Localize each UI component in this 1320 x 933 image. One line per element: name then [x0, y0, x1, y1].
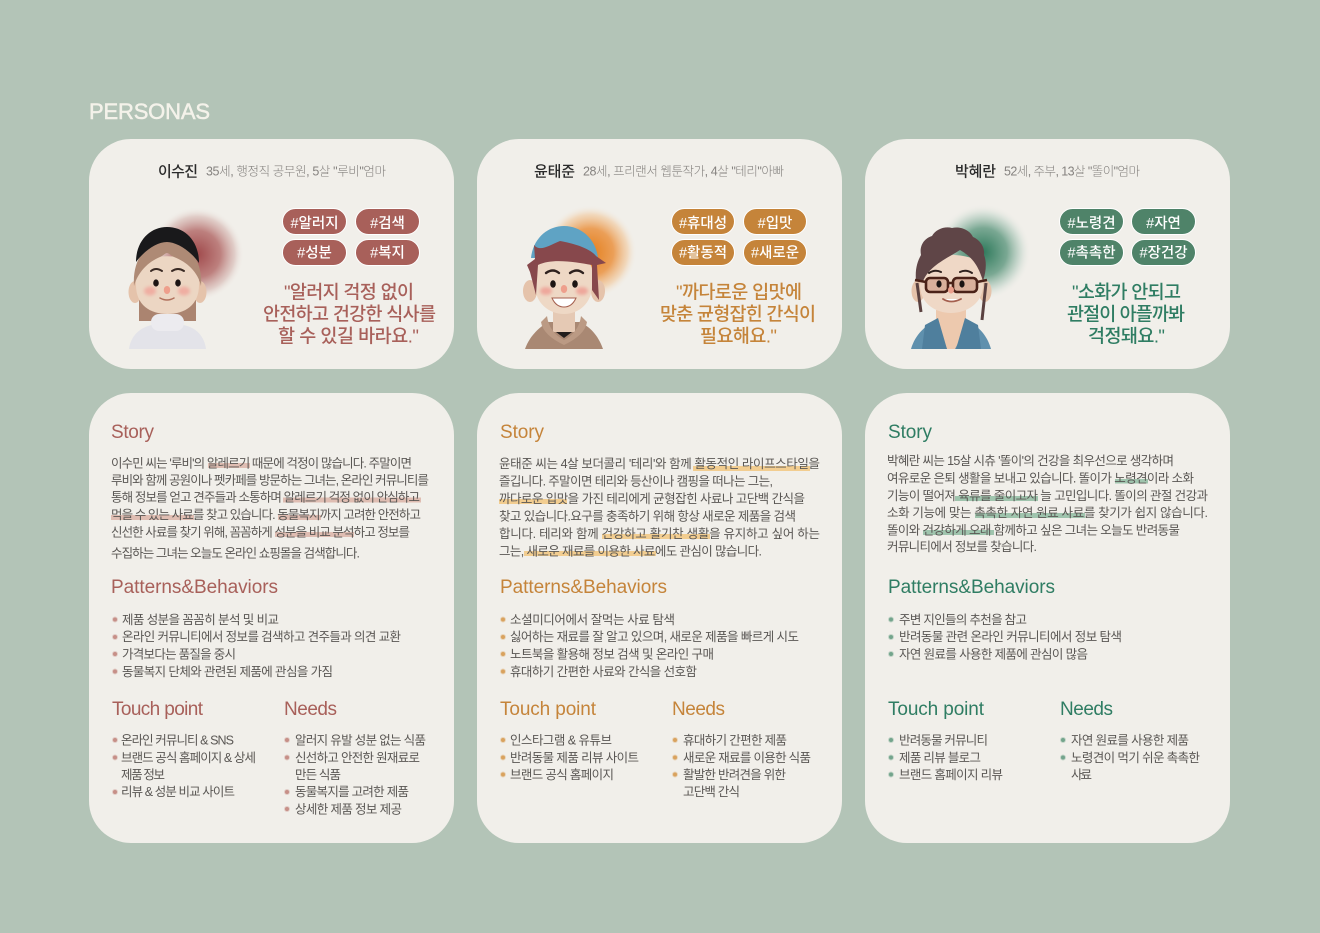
text block: story: 이수민 씨는 '루비'의 알레르기 때문에 걱정이 많습니다. 주말이면 [111, 456, 412, 470]
persona 3 hashtags [1060, 208, 1196, 266]
list: touch points: 반려동물 커뮤니티 [899, 734, 988, 748]
persona 1 hashtags [282, 208, 420, 266]
heading: patterns and behaviors: Patterns&Behaviors [888, 577, 1055, 598]
title: PERSONAS [89, 99, 210, 124]
persona 1 hashtags: #알러지 [290, 215, 339, 232]
icon: persona 1 avatar [128, 207, 244, 349]
text block: story: 그는, 새로운 재료를 이용한 사료에도 관심이 많습니다. [499, 544, 762, 558]
icon: persona 3 avatar [911, 204, 1031, 349]
list: patterns [113, 613, 401, 679]
text block: story: 똘이와 건강하게 오래 함께하고 싶은 그녀는 오늘도 반려동물 [887, 524, 1180, 538]
persona 2 hashtags: #새로운 [751, 244, 799, 262]
text block: story [499, 457, 820, 558]
text block: story: 먹을 수 있는 사료를 찾고 있습니다. 동물복지까지 고려한 안전하고 [111, 508, 421, 522]
text block: story: 신선한 사료를 찾기 위해, 꼼꼼하게 성분을 비교 분석하고 정보를 [111, 526, 410, 540]
persona 1 hashtags: #검색 [370, 215, 405, 232]
panel: persona 1 profile [89, 139, 454, 369]
panel: persona 3 profile [865, 139, 1230, 369]
persona 2 quote [660, 282, 816, 346]
list: needs: 고단백 간식 [683, 785, 740, 799]
list: patterns: 온라인 커뮤니티에서 정보를 검색하고 견주들과 의견 교환 [122, 630, 401, 644]
list: touch points: 리뷰 & 성분 비교 사이트 [121, 785, 235, 799]
persona 2 name and details [534, 164, 784, 180]
list: patterns [501, 613, 799, 679]
text block: story: 통해 정보를 얻고 견주들과 소통하며 알레르기 걱정 없이 안심하고 [111, 490, 420, 504]
heading: story: Story [888, 422, 932, 443]
list: touch points [113, 734, 256, 799]
list: touch points: 브랜드 공식 홈페이지 [510, 768, 614, 782]
heading: story: Story [111, 422, 154, 443]
persona 1 name and details: 35세, 행정직 공무원, 5살 "루비"엄마 [206, 164, 386, 178]
list: needs: 신선하고 안전한 원재료로 [295, 751, 420, 765]
text block: story: 찾고 있습니다.요구를 충족하기 위해 항상 새로운 제품을 검색 [499, 510, 796, 524]
persona 2 name and details: 28세, 프리랜서 웹툰작가, 4살 "테리"아빠 [583, 164, 784, 178]
text block: story: 윤태준 씨는 4살 보더콜리 '테리'와 함께 활동적인 라이프스타일을 [499, 457, 820, 471]
text block: story: 소화 기능에 맞는 촉촉한 자연 원료 사료를 찾기가 쉽지 않습니다. [887, 506, 1208, 520]
persona 2 quote: 필요해요." [700, 326, 777, 346]
persona 2 quote: 맞춘 균형잡힌 간식이 [660, 304, 816, 324]
panel: persona 2 profile [477, 139, 842, 369]
list: needs [285, 734, 426, 816]
text block: story: 루비와 함께 공원이나 펫카페를 방문하는 그녀는, 온라인 커뮤니티를 [111, 474, 429, 488]
icon: persona 2 avatar [523, 205, 637, 349]
list: needs: 노령견이 먹기 쉬운 촉촉한 [1071, 751, 1200, 765]
text block: story: 까다로운 입맛을 가진 테리에게 균형잡힌 사료나 고단백 간식을 [499, 492, 805, 506]
persona 3 name and details [955, 164, 1140, 180]
heading: needs: Needs [1060, 699, 1113, 720]
list: patterns: 싫어하는 재료를 잘 알고 있으며, 새로운 제품을 빠르게 시도 [510, 630, 799, 644]
persona 2 hashtags: #입맛 [758, 215, 792, 232]
list: patterns: 반려동물 관련 온라인 커뮤니티에서 정보 탐색 [899, 630, 1122, 644]
text block: story [111, 456, 429, 560]
list: touch points [889, 734, 1003, 782]
list: needs: 알러지 유발 성분 없는 식품 [295, 734, 426, 748]
persona 2 hashtags: #활동적 [679, 244, 727, 262]
persona 3 name and details: 박혜란 [955, 164, 996, 180]
text block: story: 수집하는 그녀는 오늘도 온라인 쇼핑몰을 검색합니다. [111, 546, 360, 560]
list: patterns: 동물복지 단체와 관련된 제품에 관심을 가짐 [122, 665, 333, 679]
list: patterns: 가격보다는 품질을 중시 [122, 648, 236, 662]
heading: needs: Needs [672, 699, 725, 720]
panel: persona 3 details [865, 393, 1230, 843]
list: needs: 동물복지를 고려한 제품 [295, 785, 409, 799]
persona 2 hashtags [672, 208, 806, 266]
persona 3 quote: 관절이 아플까봐 [1067, 304, 1185, 324]
persona 1 quote: 할 수 있길 바라요." [278, 326, 419, 346]
heading: needs: Needs [284, 699, 337, 720]
heading: patterns and behaviors: Patterns&Behaviors [111, 577, 278, 598]
heading: touch point: Touch point [500, 699, 597, 720]
persona 3 hashtags: #장건강 [1139, 244, 1188, 262]
list: needs [1061, 734, 1200, 782]
list: patterns: 소셜미디어에서 잘먹는 사료 탐색 [510, 613, 675, 627]
persona 3 hashtags: #촉촉한 [1067, 244, 1116, 262]
list: patterns [889, 612, 1122, 662]
list: touch points [501, 734, 639, 782]
list: needs: 만든 식품 [295, 768, 341, 782]
persona 1 hashtags: #복지 [370, 244, 405, 262]
list: patterns: 휴대하기 간편한 사료와 간식을 선호함 [510, 665, 697, 679]
heading: touch point: Touch point [112, 699, 204, 720]
persona 1 quote: "알러지 걱정 없이 [284, 282, 414, 302]
persona 3 quote [1067, 282, 1185, 346]
list: touch points: 브랜드 공식 홈페이지 & 상세 [121, 751, 256, 765]
list: needs [673, 734, 811, 799]
persona 2 name and details: 윤태준 [534, 164, 575, 180]
heading: story: Story [500, 422, 544, 443]
persona 1 hashtags: #성분 [297, 244, 332, 262]
persona 3 quote: "소화가 안되고 [1072, 282, 1181, 302]
list: touch points: 제품 정보 [121, 768, 165, 782]
persona 2 hashtags: #휴대성 [679, 215, 727, 232]
persona 1 name and details [158, 164, 386, 180]
persona 1 quote [263, 282, 436, 346]
list: patterns: 노트북을 활용해 정보 검색 및 온라인 구매 [510, 648, 714, 662]
persona 3 name and details: 52세, 주부, 13살 "똘이"엄마 [1004, 164, 1140, 178]
list: touch points: 인스타그램 & 유튜브 [510, 734, 612, 748]
persona 3 quote: 걱정돼요." [1088, 326, 1165, 346]
list: needs: 휴대하기 간편한 제품 [683, 734, 787, 748]
list: touch points: 브랜드 홈페이지 리뷰 [899, 768, 1003, 782]
text block: story: 커뮤니티에서 정보를 찾습니다. [887, 540, 1037, 554]
text block: story [887, 454, 1208, 554]
text block: story: 즐깁니다. 주말이면 테리와 등산이나 캠핑을 떠나는 그는, [499, 474, 773, 488]
heading: patterns and behaviors: Patterns&Behaviors [500, 577, 667, 598]
panel: persona 2 details [477, 393, 842, 843]
list: needs: 자연 원료를 사용한 제품 [1071, 734, 1189, 748]
list: patterns: 제품 성분을 꼼꼼히 분석 및 비교 [122, 613, 279, 627]
persona 3 hashtags: #자연 [1146, 215, 1181, 232]
text block: story: 여유로운 은퇴 생활을 보내고 있습니다. 똘이가 노령견이라 소화 [887, 472, 1194, 486]
list: needs: 활발한 반려견을 위한 [683, 768, 786, 782]
persona 1 quote: 안전하고 건강한 식사를 [263, 304, 436, 324]
text block: story: 합니다. 테리와 함께 건강하고 활기찬 생활을 유지하고 싶어 하는 [499, 526, 820, 541]
list: needs: 새로운 재료를 이용한 식품 [683, 751, 811, 765]
heading: touch point: Touch point [888, 699, 985, 720]
text block: story: 기능이 떨어져 육류를 줄이고자 늘 고민입니다. 똘이의 관절 건강과 [887, 489, 1208, 503]
list: touch points: 온라인 커뮤니티 & SNS [121, 734, 234, 748]
persona 1 name and details: 이수진 [158, 164, 198, 180]
persona 3 hashtags: #노령견 [1067, 215, 1116, 232]
list: patterns: 주변 지인들의 추천을 참고 [899, 612, 1027, 627]
list: touch points: 반려동물 제품 리뷰 사이트 [510, 751, 639, 765]
panel: persona 1 details [89, 393, 454, 843]
list: touch points: 제품 리뷰 블로그 [899, 751, 981, 765]
text block: story: 박혜란 씨는 15살 시츄 '똘이'의 건강을 최우선으로 생각하며 [887, 454, 1174, 468]
list: needs: 사료 [1071, 768, 1092, 782]
persona 2 quote: "까다로운 입맛에 [676, 282, 802, 302]
list: needs: 상세한 제품 정보 제공 [295, 802, 402, 816]
list: patterns: 자연 원료를 사용한 제품에 관심이 많음 [899, 648, 1088, 662]
